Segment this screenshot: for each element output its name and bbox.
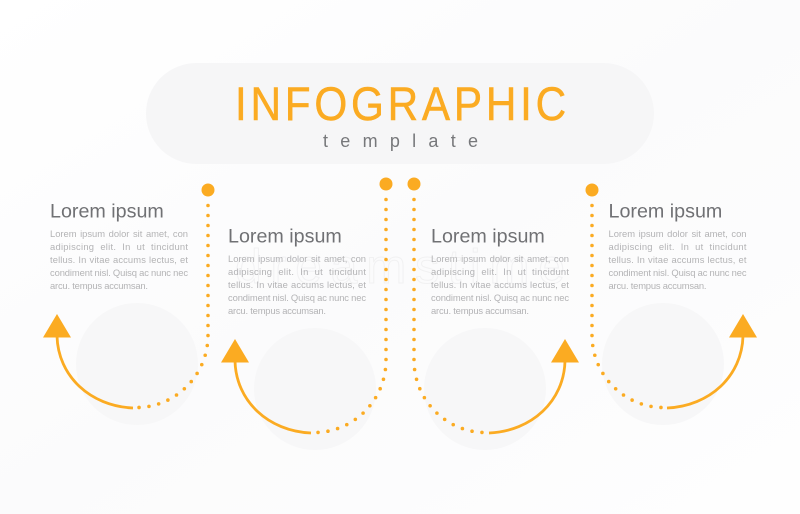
body text: arcu. tempus accumsan.	[431, 305, 529, 316]
body text: arcu. tempus accumsan.	[608, 280, 706, 291]
connector: step 4	[586, 184, 757, 408]
body text: Lorem ipsum dolor sit amet, con	[608, 228, 746, 239]
body text: tellus. In vitae accums lectus, et	[228, 279, 366, 290]
connector: step 2	[221, 178, 392, 433]
title pill	[146, 63, 654, 164]
body text: arcu. tempus accumsan.	[50, 280, 148, 291]
panel: step 4	[586, 184, 757, 425]
body text: adipiscing elit. In ut tincidunt	[608, 241, 747, 252]
circle placeholder	[424, 328, 546, 450]
panel: step 1	[43, 184, 214, 425]
body text: Lorem ipsum dolor sit amet, con	[50, 228, 188, 239]
circle placeholder	[254, 328, 376, 450]
panel: step 3	[408, 178, 579, 450]
body text: adipiscing elit. In ut tincidunt	[431, 266, 569, 277]
body text: adipiscing elit. In ut tincidunt	[228, 266, 366, 277]
subtitle: template	[323, 131, 478, 151]
panel: step 2	[221, 178, 392, 450]
circle placeholder	[602, 303, 724, 425]
body text: condiment nisl. Quisq ac nunc nec	[228, 292, 366, 303]
body text: tellus. In vitae accums lectus, et	[608, 254, 747, 265]
body text: adipiscing elit. In ut tincidunt	[50, 241, 188, 252]
watermark: dreamstime	[235, 241, 565, 294]
body text: Lorem ipsum dolor sit amet, con	[228, 253, 366, 264]
body text	[431, 253, 569, 316]
body text: arcu. tempus accumsan.	[228, 305, 326, 316]
body text: Lorem ipsum dolor sit amet, con	[431, 253, 569, 264]
connector: step 1	[43, 184, 214, 408]
body text: condiment nisl. Quisq ac nunc nec	[431, 292, 569, 303]
title: INFOGRAPHIC	[235, 79, 566, 131]
connector: step 3	[408, 178, 579, 433]
circle placeholder	[76, 303, 198, 425]
body text: condiment nisl. Quisq ac nunc nec	[608, 267, 747, 278]
heading: Lorem ipsum	[608, 200, 722, 222]
body text	[608, 228, 747, 291]
body text: tellus. In vitae accums lectus, et	[431, 279, 569, 290]
heading: Lorem ipsum	[228, 226, 342, 248]
body text	[228, 253, 366, 316]
body text: condiment nisl. Quisq ac nunc nec	[50, 267, 188, 278]
body text	[50, 228, 188, 291]
body text: tellus. In vitae accums lectus, et	[50, 254, 188, 265]
heading: Lorem ipsum	[431, 226, 545, 248]
heading: Lorem ipsum	[50, 200, 164, 222]
